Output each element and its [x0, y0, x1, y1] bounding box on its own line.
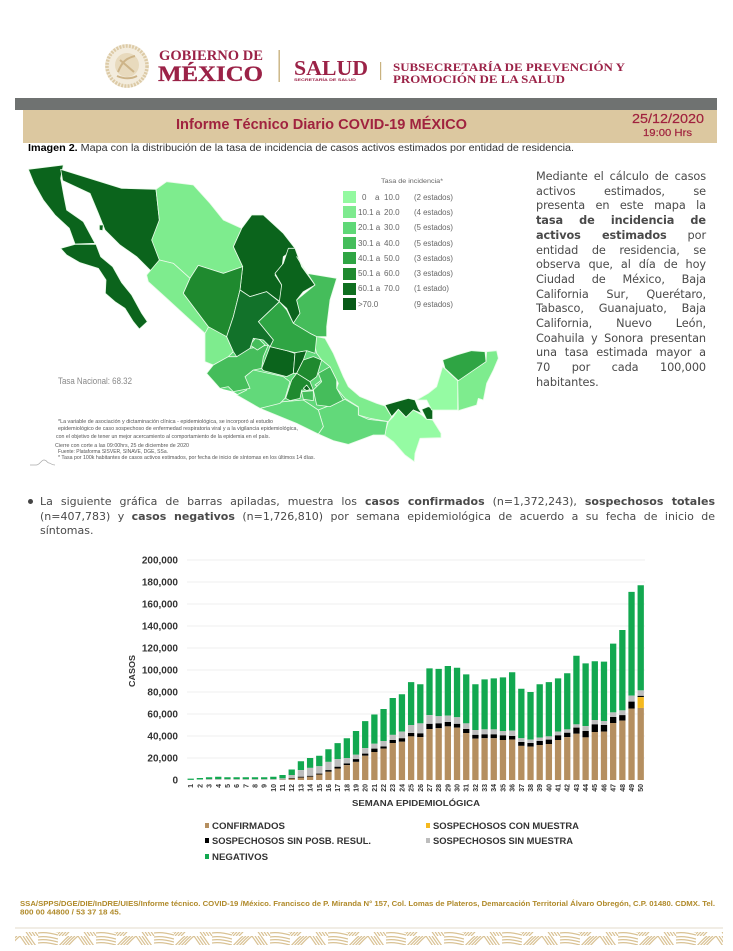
y axis labels: 80,000	[147, 688, 178, 698]
x axis week labels: 45	[592, 784, 599, 792]
x axis week labels: 32	[473, 784, 480, 792]
x axis week labels: 31	[464, 784, 471, 792]
x axis week labels: 29	[445, 784, 452, 792]
y axis title: CASOS	[127, 655, 137, 687]
logo: Salud: SALUD	[294, 56, 368, 80]
map legend: >70.0	[358, 300, 379, 309]
footer ornament band	[15, 927, 723, 945]
map legend: (5 estados)	[414, 239, 453, 248]
map legend: (3 estados)	[414, 254, 453, 263]
date: 19:00 Hrs	[643, 127, 692, 139]
map legend: 0	[362, 193, 367, 202]
y axis labels	[142, 556, 178, 786]
chart legend: CONFIRMADOS	[212, 821, 285, 831]
x axis week labels: 42	[565, 784, 572, 792]
y axis labels: 200,000	[142, 556, 178, 566]
map legend: (3 estados)	[414, 269, 453, 278]
x axis week labels: 3	[207, 784, 214, 788]
map legend: (2 estados)	[414, 193, 453, 202]
legend title: Tasa de incidencia*	[381, 178, 443, 185]
choropleth map of Mexico	[28, 165, 498, 462]
x axis week labels: 11	[280, 784, 287, 791]
map footnotes: Cierre con corte a las 09:00hrs, 25 de diciembre de 2020	[55, 443, 189, 449]
side text block: Ciudad de México, Baja	[536, 273, 706, 286]
x axis week labels: 43	[574, 784, 581, 792]
x axis week labels: 23	[390, 784, 397, 792]
x axis week labels: 33	[482, 784, 489, 792]
map legend: 70.0	[384, 284, 400, 293]
side text block: activos estimados por	[536, 229, 706, 242]
x axis week labels: 21	[372, 784, 379, 792]
map legend: 20.1 a	[358, 223, 381, 232]
y axis labels: 100,000	[142, 666, 178, 676]
side text block: habitantes.	[536, 376, 599, 389]
map legend: 60.0	[384, 269, 400, 278]
date: 25/12/2020	[632, 112, 704, 126]
map legend: a	[375, 193, 380, 202]
chart legend: NEGATIVOS	[212, 852, 268, 862]
map footnotes: *La variable de asociación y dictaminación clínica - epidemiológica, se incorporó al estudio	[58, 419, 273, 425]
x axis week labels: 14	[308, 784, 315, 792]
bullet paragraph: (n=407,783) y casos negativos (n=1,726,810) por semana epidemiológica de acuerdo a su fecha de inicio de	[40, 510, 715, 523]
x axis week labels: 35	[500, 784, 507, 792]
bullet paragraph: La siguiente gráfica de barras apiladas, muestra los casos confirmados (n=1,372,243), sospechosos totales	[40, 495, 715, 508]
side text block: entidad de residencia, se	[536, 244, 706, 257]
title: Informe Técnico Diario COVID-19 MÉXICO	[176, 116, 467, 133]
bars: negativos	[191, 585, 641, 780]
y axis labels: 140,000	[142, 622, 178, 632]
x axis week labels: 39	[537, 784, 544, 792]
gray header bar	[15, 98, 717, 110]
side text block: activos estimados, se	[536, 185, 706, 198]
map legend: 10.1 a	[358, 208, 381, 217]
x axis week labels: 13	[298, 784, 305, 792]
bars: sospechosos sin muestra	[209, 690, 641, 780]
x axis week labels: 40	[546, 784, 553, 792]
map legend: 20.0	[384, 208, 400, 217]
bullet paragraph	[40, 495, 715, 537]
x axis week labels: 41	[556, 784, 562, 792]
map legend: 30.0	[384, 223, 400, 232]
map footnotes: con el objetivo de tener un mejor acercamiento al comportamiento de la epidemia en el país.	[56, 434, 270, 440]
x axis week labels: 27	[427, 784, 434, 792]
side text block: una tasa estimada mayor a	[536, 346, 706, 359]
map caption: Imagen 2. Mapa con la distribución de la tasa de incidencia de casos activos estimados por entidad de residencia.	[28, 143, 574, 154]
logo: Subsecretaría: SUBSECRETARÍA DE PREVENCIÓN Y	[393, 60, 625, 74]
map legend: (4 estados)	[414, 208, 453, 217]
bullet marker	[28, 499, 33, 504]
x axis week labels: 5	[225, 784, 232, 788]
icon: small curve	[30, 460, 55, 465]
x axis week labels: 12	[289, 784, 296, 792]
map legend: 60.1 a	[358, 284, 381, 293]
side text block: observa que, al día de hoy	[536, 258, 706, 271]
logo: Subsecretaría: PROMOCIÓN DE LA SALUD	[393, 72, 565, 86]
x axis week labels: 49	[629, 784, 636, 792]
logo: Salud: SECRETARÍA DE SALUD	[294, 77, 356, 82]
x axis week labels: 18	[344, 784, 351, 792]
side text block: Coahuila y Sonora presentan	[536, 332, 706, 345]
x axis week labels: 10	[271, 784, 278, 792]
bars: sospechosos con muestra	[638, 697, 644, 708]
x axis week labels: 44	[583, 784, 590, 792]
side text block: 70 por cada 100,000	[536, 361, 706, 374]
date	[632, 112, 704, 139]
x axis week labels: 19	[354, 784, 360, 792]
map footnotes: * Tasa por 100k habitantes de casos activos estimados, por fecha de inicio de síntomas en los últimos 14 días.	[58, 455, 315, 461]
y axis labels: 20,000	[147, 754, 178, 764]
map legend: 40.1 a	[358, 254, 381, 263]
x axis title: SEMANA EPIDEMIOLÓGICA	[352, 797, 480, 808]
map legend	[343, 178, 453, 310]
logo: Gobierno de México: GOBIERNO DE	[159, 48, 263, 64]
map footnotes: epidemiológico de caso sospechoso de enfermedad respiratoria viral y a la vigilancia epidemiológica,	[58, 426, 298, 432]
x axis week labels: 25	[409, 784, 416, 792]
map footnotes: Fuente: Plataforma SISVER, SINAVE, DGE, SSa.	[58, 449, 168, 455]
x axis week labels: 24	[399, 784, 406, 792]
side text block: presenta en este mapa la	[536, 199, 706, 212]
bars: confirmados	[283, 708, 641, 780]
side text block: Tabasco, Guanajuato, Baja	[536, 302, 706, 315]
x axis week labels: 38	[528, 784, 535, 792]
map legend: (5 estados)	[414, 223, 453, 232]
logo: Subsecretaría	[393, 60, 625, 86]
map legend: 30.1 a	[358, 239, 381, 248]
x axis week labels: 28	[436, 784, 443, 792]
x axis week labels: 37	[519, 784, 526, 792]
national rate: Tasa Nacional: 68.32	[58, 376, 132, 386]
x axis week labels	[188, 784, 645, 792]
title band	[23, 110, 717, 143]
footer address: 800 00 44800 / 53 37 18 45.	[20, 908, 121, 916]
x axis week labels: 47	[611, 784, 618, 792]
x axis week labels: 34	[491, 784, 498, 792]
map legend: (1 estado)	[414, 284, 449, 293]
x axis week labels: 50	[638, 784, 645, 792]
x axis week labels: 7	[243, 784, 250, 788]
y axis labels: 40,000	[147, 732, 178, 742]
y axis labels: 160,000	[142, 600, 178, 610]
map legend: 50.1 a	[358, 269, 381, 278]
y axis labels: 120,000	[142, 644, 178, 654]
bullet paragraph: síntomas.	[40, 524, 94, 537]
y axis labels: 180,000	[142, 578, 178, 588]
x axis week labels: 26	[418, 784, 425, 792]
chart legend: SOSPECHOSOS SIN POSB. RESUL.	[212, 836, 371, 846]
x axis week labels: 22	[381, 784, 388, 792]
stacked bar chart	[127, 556, 645, 808]
side text block: Mediante el cálculo de casos	[536, 170, 706, 183]
side text block: California Sur, Querétaro,	[536, 288, 706, 301]
side text block: California, Nuevo León,	[536, 317, 706, 330]
side text block	[536, 170, 706, 389]
y axis labels: 60,000	[147, 710, 178, 720]
bars: sospechosos sin posibilidad de resultado	[283, 696, 641, 780]
x axis week labels: 36	[510, 784, 517, 792]
x axis week labels: 16	[326, 784, 333, 792]
x axis week labels: 2	[197, 784, 204, 788]
x axis week labels: 9	[262, 784, 269, 788]
header logos	[105, 44, 625, 88]
x axis week labels: 20	[363, 784, 370, 792]
side text block: tasa de incidencia de	[536, 214, 706, 227]
chart legend: SOSPECHOSOS CON MUESTRA	[433, 821, 580, 831]
x axis week labels: 4	[216, 784, 223, 788]
map legend: 10.0	[384, 193, 400, 202]
logo: Gobierno de México	[158, 48, 263, 86]
icon: national emblem	[105, 44, 149, 88]
chart legend	[205, 821, 580, 862]
footer address	[20, 899, 715, 916]
x axis week labels: 30	[454, 784, 462, 792]
map legend: (9 estados)	[414, 300, 453, 309]
map footnotes	[55, 419, 315, 461]
x axis week labels: 48	[620, 784, 627, 792]
x axis week labels: 6	[234, 784, 241, 788]
footer address: SSA/SPPS/DGE/DIE/InDRE/UIES/Informe técnico. COVID-19 /México. Francisco de P. Miranda N° 157, Col. Lomas de Plateros, Demarcación Territorial Álvaro Obregón, C.P. 01480. CDMX. Tel.	[20, 899, 715, 908]
chart legend: SOSPECHOSOS SIN MUESTRA	[433, 836, 574, 846]
x axis week labels: 17	[335, 784, 342, 792]
x axis week labels: 15	[317, 784, 324, 792]
x axis week labels: 8	[252, 784, 260, 788]
y axis labels: 0	[172, 776, 178, 786]
map legend: 40.0	[384, 239, 400, 248]
x axis week labels: 1	[188, 784, 195, 788]
x axis week labels: 46	[601, 784, 608, 792]
map legend: 50.0	[384, 254, 400, 263]
logo: Gobierno de México: MÉXICO	[158, 61, 263, 86]
